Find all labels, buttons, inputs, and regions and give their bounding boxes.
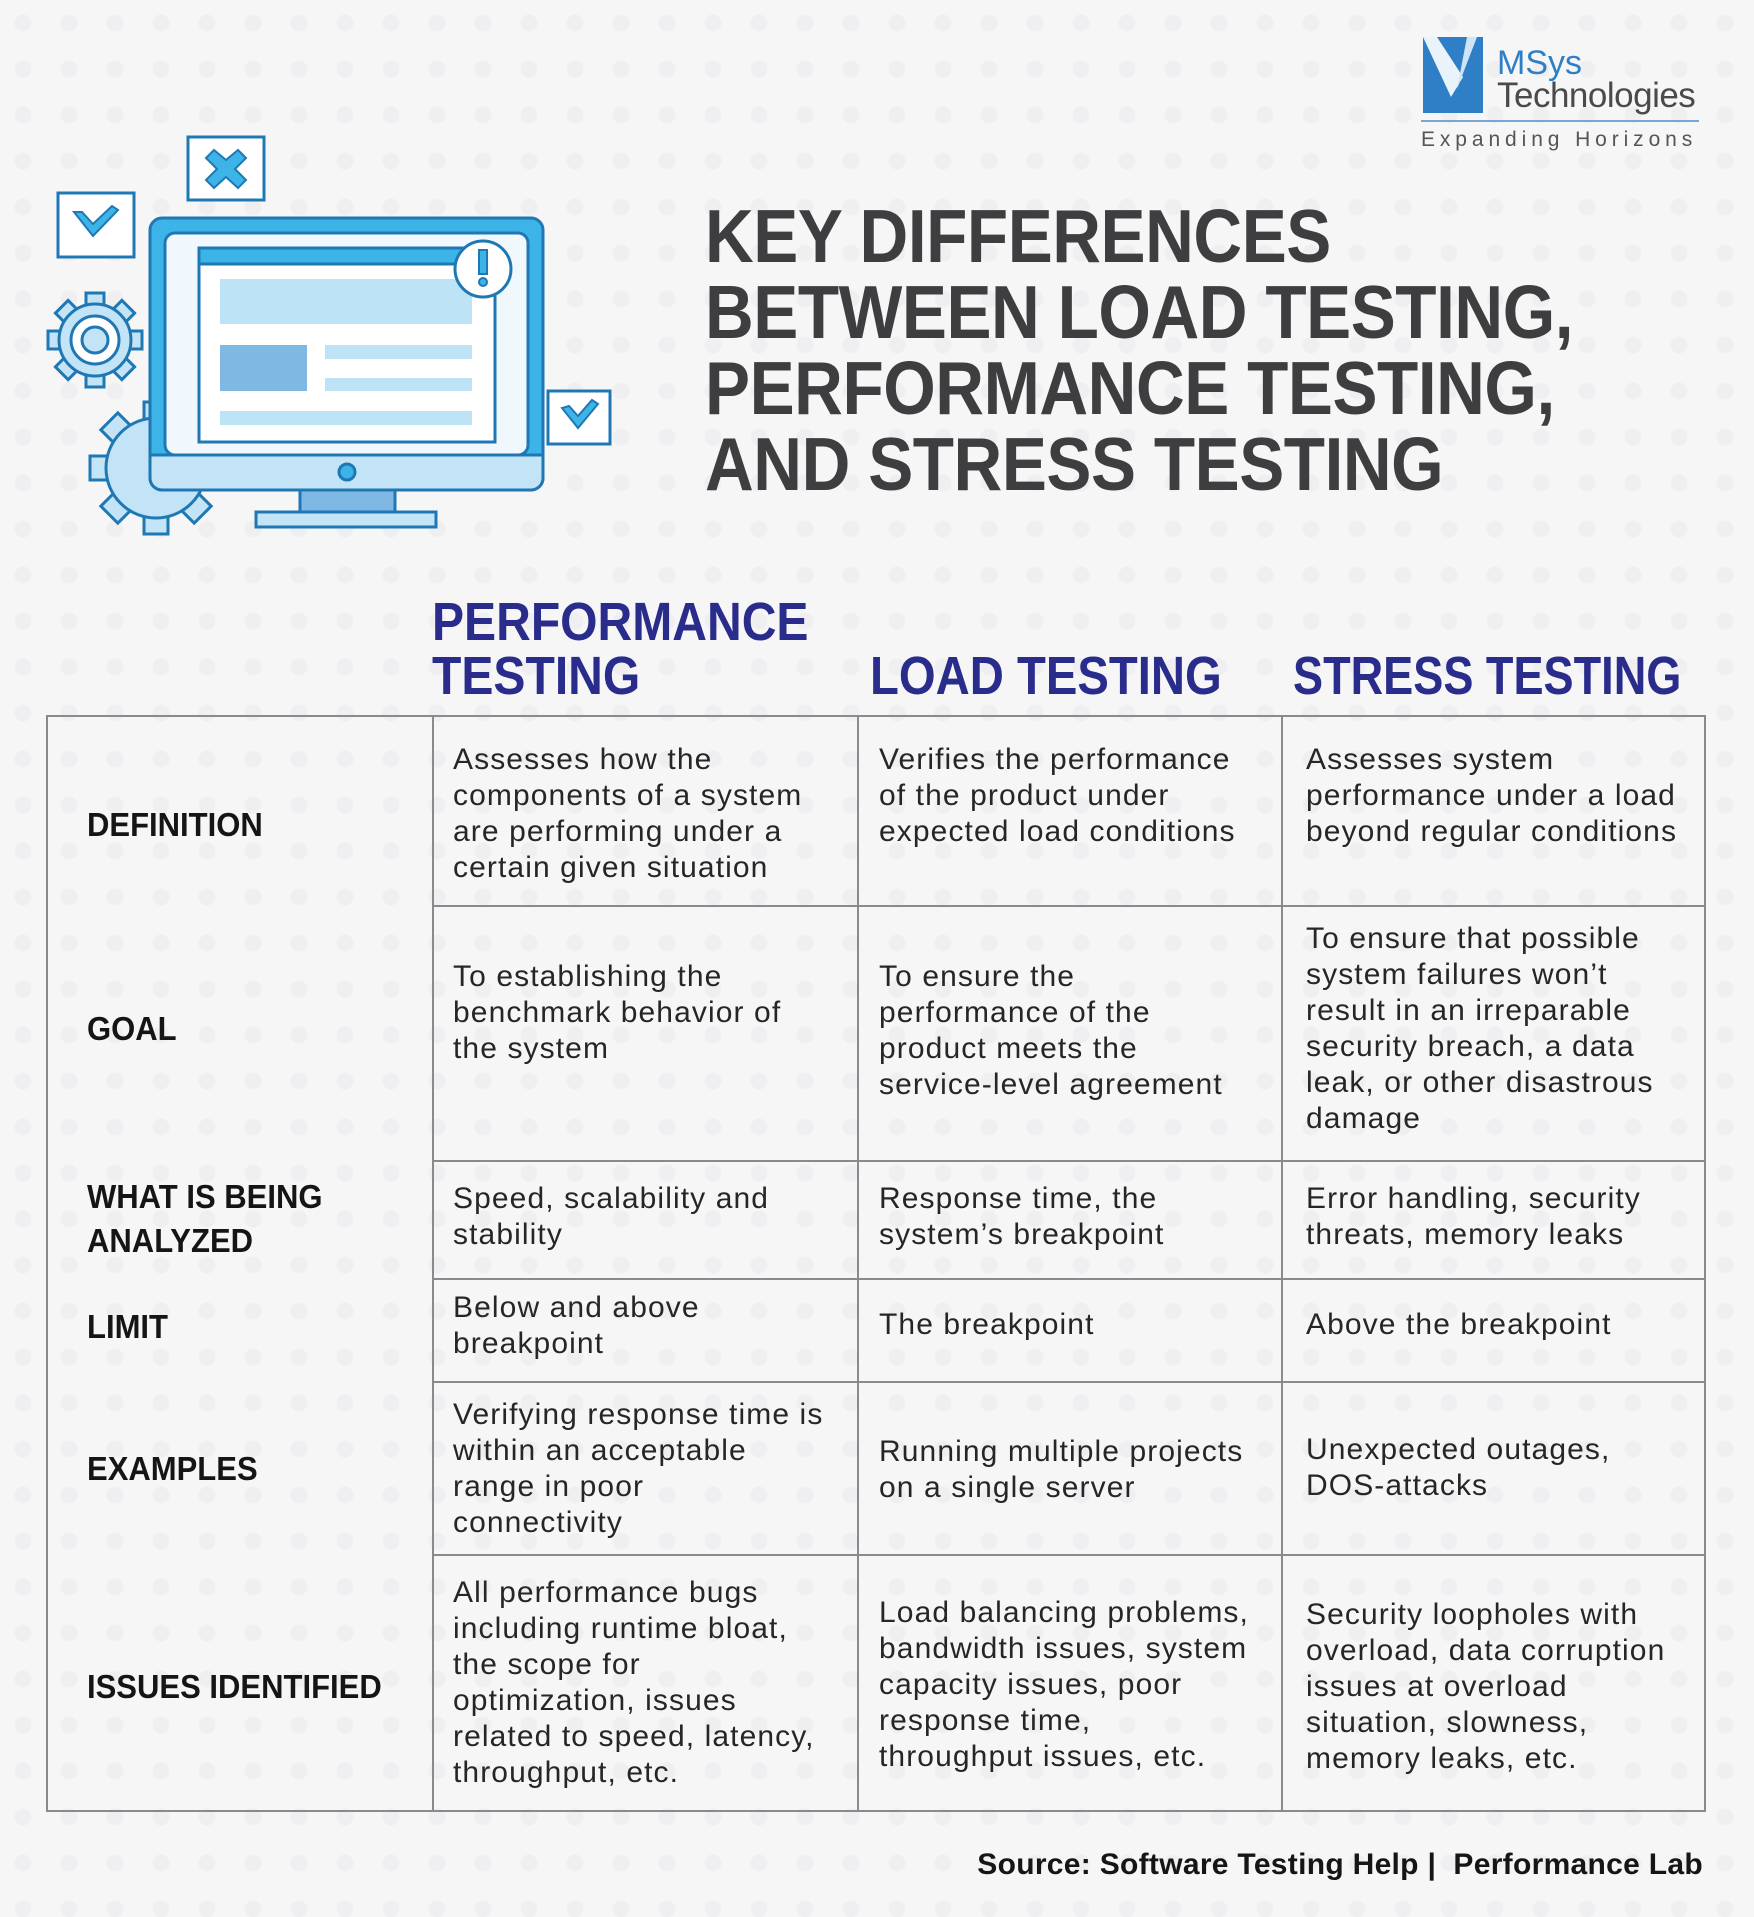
column header: stress testing: STRESS TESTING (1293, 646, 1681, 706)
cell: goal load: performance of the (879, 996, 1151, 1029)
title: PERFORMANCE TESTING, (705, 346, 1555, 430)
cell: examples stress (1306, 1433, 1610, 1502)
row label: definition: DEFINITION (87, 806, 263, 843)
column header: performance testing: TESTING (432, 646, 640, 706)
cell: analyzed load (879, 1182, 1164, 1251)
cell: analyzed performance: stability (453, 1218, 563, 1251)
cell: analyzed stress: Error handling, security (1306, 1182, 1641, 1215)
cell: goal stress: leak, or other disastrous (1306, 1066, 1654, 1099)
title (705, 194, 1573, 506)
cell: limit stress: Above the breakpoint (1306, 1308, 1612, 1341)
cell: issues stress (1306, 1598, 1665, 1775)
cell: issues performance: optimization, issues (453, 1684, 737, 1717)
column header: load testing: LOAD TESTING (870, 646, 1222, 706)
icon: alert circle (455, 241, 511, 297)
cell: analyzed performance: Speed, scalability and (453, 1182, 769, 1215)
icon: logo square (1423, 37, 1483, 113)
cell: definition performance: certain given situation (453, 851, 768, 884)
logo: MSys Technologies: Technologies (1497, 76, 1695, 115)
logo: MSys Technologies (1421, 37, 1699, 151)
cell: issues stress: memory leaks, etc. (1306, 1742, 1578, 1775)
title: BETWEEN LOAD TESTING, (705, 270, 1573, 354)
cell: issues performance: All performance bugs (453, 1576, 758, 1609)
cell: definition performance: Assesses how the (453, 743, 712, 776)
title: KEY DIFFERENCES (705, 194, 1331, 278)
cell: examples load: on a single server (879, 1471, 1136, 1504)
cell: goal load: To ensure the (879, 960, 1075, 993)
logo: MSys Technologies: Expanding Horizons (1421, 128, 1697, 151)
cell: definition stress: Assesses system (1306, 743, 1554, 776)
cell: definition load: expected load conditions (879, 815, 1236, 848)
cell: examples performance: connectivity (453, 1506, 623, 1539)
cell: analyzed stress (1306, 1182, 1641, 1251)
cell: issues load: throughput issues, etc. (879, 1740, 1206, 1773)
cell: analyzed load: system’s breakpoint (879, 1218, 1164, 1251)
monitor (150, 218, 543, 527)
cell: examples performance: within an acceptable (453, 1434, 747, 1467)
cell: examples performance (453, 1398, 823, 1539)
cell: examples load (879, 1435, 1243, 1504)
cell: issues performance: throughput, etc. (453, 1756, 679, 1789)
cell: goal performance: the system (453, 1032, 609, 1065)
cell: limit load: The breakpoint (879, 1308, 1095, 1341)
icon: gear (48, 293, 142, 387)
cell: issues performance: the scope for (453, 1648, 641, 1681)
cell: examples performance: Verifying response time is (453, 1398, 823, 1431)
cell: issues stress: overload, data corruption (1306, 1634, 1665, 1667)
cell: issues load: bandwidth issues, system (879, 1632, 1247, 1665)
row label: what is being analyzed: ANALYZED (87, 1222, 253, 1259)
cell: issues load: Load balancing problems, (879, 1596, 1249, 1629)
cell: definition load: of the product under (879, 779, 1170, 812)
cell: analyzed stress: threats, memory leaks (1306, 1218, 1624, 1251)
row label: what is being analyzed: WHAT IS BEING (87, 1178, 323, 1215)
cell: definition performance: are performing under a (453, 815, 782, 848)
icon: check box left (58, 193, 134, 257)
cell: issues performance (453, 1576, 815, 1789)
cell: examples stress: DOS-attacks (1306, 1469, 1488, 1502)
row label: what is being analyzed (87, 1178, 323, 1259)
cell: goal load: product meets the (879, 1032, 1138, 1065)
cell: issues load (879, 1596, 1249, 1773)
cell: goal stress: system failures won’t (1306, 958, 1608, 991)
cell: definition stress: beyond regular conditions (1306, 815, 1677, 848)
cell: examples stress: Unexpected outages, (1306, 1433, 1610, 1466)
cell: issues stress: situation, slowness, (1306, 1706, 1588, 1739)
row label: goal: GOAL (87, 1010, 177, 1047)
icon: check box right (548, 391, 610, 444)
column header: performance testing: PERFORMANCE (432, 592, 808, 652)
icon: gear back (90, 402, 222, 534)
cell: definition stress (1306, 743, 1677, 848)
row label: limit: LIMIT (87, 1308, 168, 1345)
cell: goal performance: To establishing the (453, 960, 722, 993)
cell: goal stress: result in an irreparable (1306, 994, 1631, 1027)
cell: goal performance (453, 960, 781, 1065)
cell: issues stress: Security loopholes with (1306, 1598, 1638, 1631)
cell: issues load: response time, (879, 1704, 1091, 1737)
row label: examples: EXAMPLES (87, 1450, 258, 1487)
cell: goal stress: damage (1306, 1102, 1421, 1135)
cell: issues load: capacity issues, poor (879, 1668, 1182, 1701)
cell: analyzed load: Response time, the (879, 1182, 1157, 1215)
cell: analyzed performance (453, 1182, 769, 1251)
cell: definition stress: performance under a load (1306, 779, 1676, 812)
icon: x box (188, 137, 264, 200)
source footer: Source: Software Testing Help | Performance Lab (977, 1848, 1703, 1881)
title: AND STRESS TESTING (705, 422, 1443, 506)
cell: issues stress: issues at overload (1306, 1670, 1568, 1703)
cell: issues performance: related to speed, latency, (453, 1720, 815, 1753)
cell: limit performance: Below and above (453, 1291, 700, 1324)
cell: definition performance (453, 743, 802, 884)
logo text: MSys (1497, 44, 1582, 82)
cell: definition load (879, 743, 1236, 848)
cell: examples load: Running multiple projects (879, 1435, 1243, 1468)
cell: goal load: service-level agreement (879, 1068, 1223, 1101)
cell: goal performance: benchmark behavior of (453, 996, 781, 1029)
row label: issues identified: ISSUES IDENTIFIED (87, 1668, 382, 1705)
cell: limit performance (453, 1291, 700, 1360)
cell: goal stress: security breach, a data (1306, 1030, 1635, 1063)
illustration: monitor with icons (46, 136, 612, 536)
cell: definition load: Verifies the performance (879, 743, 1231, 776)
cell: goal stress: To ensure that possible (1306, 922, 1640, 955)
comparison table (46, 715, 1706, 1812)
cell: issues performance: including runtime bloat, (453, 1612, 788, 1645)
column header: performance testing (432, 592, 808, 706)
cell: goal load (879, 960, 1223, 1101)
cell: examples performance: range in poor (453, 1470, 644, 1503)
cell: goal stress (1306, 922, 1654, 1135)
cell: definition performance: components of a system (453, 779, 802, 812)
cell: limit performance: breakpoint (453, 1327, 604, 1360)
